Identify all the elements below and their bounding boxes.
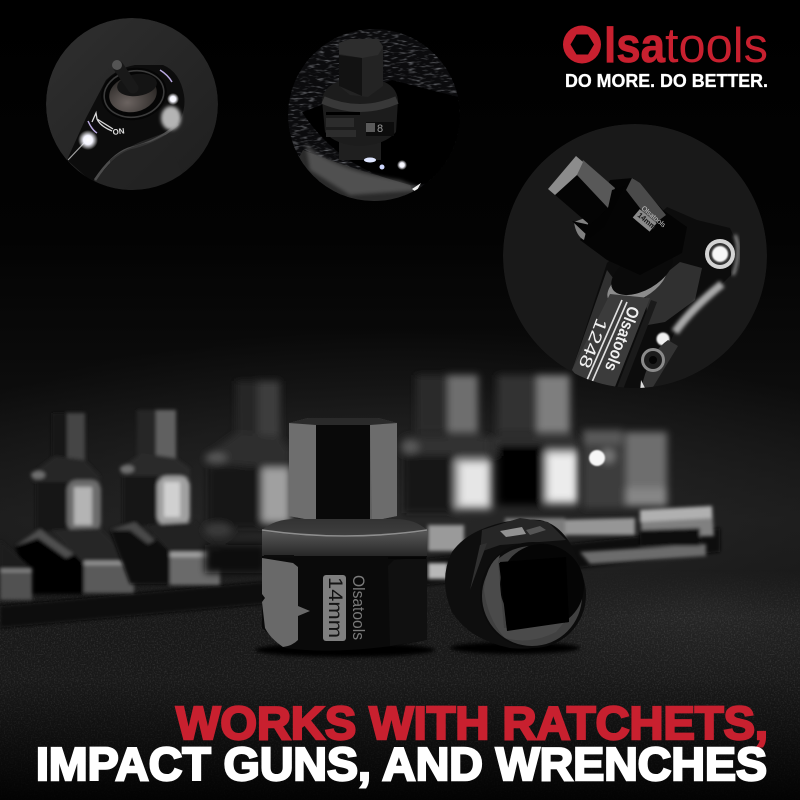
hex shank — [289, 418, 397, 521]
headline line one: WORKS WITH RATCHETS, — [176, 697, 768, 749]
drive opening — [480, 542, 586, 648]
tagline: DO MORE. DO BETTER. — [565, 71, 768, 91]
headline — [36, 697, 768, 790]
ratchet handle — [67, 65, 184, 182]
bottom fade — [0, 680, 800, 800]
socket body — [322, 80, 398, 146]
ratchet inner disc — [109, 80, 157, 112]
handle label band — [572, 294, 657, 392]
hex bit — [548, 156, 615, 234]
main socket 14mm — [255, 418, 435, 657]
hex shank — [339, 39, 383, 97]
socket body: Olsatools — [640, 205, 667, 230]
blurred small socket with light — [583, 430, 667, 508]
blurred socket E — [490, 375, 578, 505]
socket body band — [262, 531, 427, 558]
socket lower nub — [339, 142, 381, 160]
ON mark: ON — [112, 126, 125, 137]
direction arrow — [92, 113, 113, 131]
size label: 14mm — [324, 577, 345, 638]
blurred rail highlights — [428, 506, 714, 579]
wrench body — [572, 207, 740, 392]
blurred rack of sockets — [0, 368, 800, 788]
size code: 1248 — [575, 316, 611, 371]
blurred socket A — [15, 413, 134, 594]
rail — [0, 528, 720, 628]
logo on handle: Olsatools — [601, 304, 643, 374]
second socket square drive — [445, 518, 586, 654]
circle photo: socket on ratchet over fabric — [288, 29, 470, 205]
blurred bright point — [589, 450, 605, 466]
wordmark: lsa — [604, 19, 666, 73]
lower screw — [640, 348, 665, 392]
socket body top — [262, 519, 427, 558]
floor texture — [0, 584, 800, 788]
blurred socket D — [401, 375, 492, 513]
speckled chrome area — [645, 262, 702, 325]
fabric texture — [288, 29, 460, 201]
socket body: 8 — [377, 123, 383, 135]
chrome reflections — [642, 235, 738, 392]
ratchet plate — [302, 80, 470, 185]
bolt — [705, 239, 735, 269]
handle left plate — [572, 270, 612, 370]
highlights — [167, 93, 179, 105]
socket lower body — [262, 555, 427, 651]
logo mark hexagon ring — [563, 26, 601, 64]
chrome collar — [607, 276, 666, 298]
headline line two: IMPACT GUNS, AND WRENCHES — [36, 738, 767, 790]
drive shaft — [112, 60, 130, 80]
blurred socket C — [204, 381, 290, 573]
socket body — [574, 178, 687, 275]
blurred socket B — [110, 410, 220, 585]
socket body: 14mm — [636, 211, 658, 232]
logo: tools — [665, 19, 768, 73]
circle photo: socket on ratchet closeup — [503, 124, 767, 392]
light spots — [364, 158, 421, 192]
blurred left block — [0, 540, 32, 600]
ratchet ring — [162, 106, 163, 107]
circle photo: ratchet with ON arrow — [46, 18, 218, 195]
engraved logo: Olsatools — [349, 575, 368, 640]
chrome speckle — [299, 150, 413, 201]
logo — [563, 19, 768, 91]
